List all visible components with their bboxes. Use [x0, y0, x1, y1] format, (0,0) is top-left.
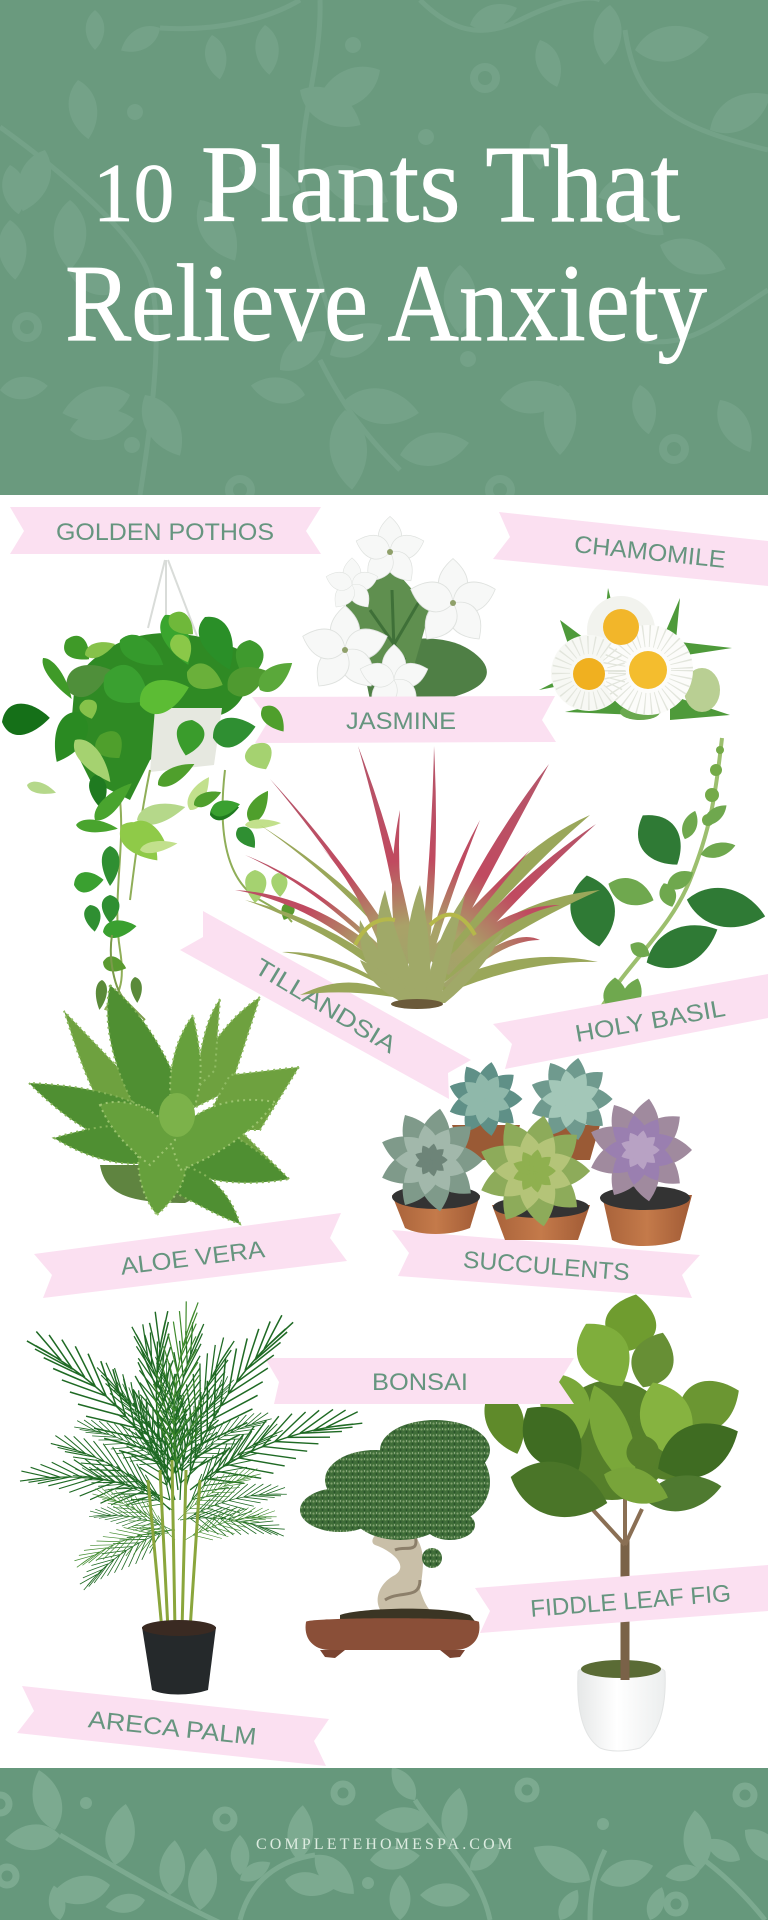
label: chamomile [493, 512, 768, 586]
black pot [142, 1627, 216, 1694]
label: aloe vera: ALOE VERA [119, 1236, 266, 1281]
label: aloe vera [34, 1213, 347, 1298]
palm stems [148, 1460, 200, 1630]
footer panel [0, 1762, 768, 1920]
vine tail [111, 935, 145, 1020]
foliage mass [70, 633, 248, 800]
hanger [148, 560, 197, 636]
label: areca palm [17, 1686, 329, 1766]
label: golden pothos [10, 507, 321, 554]
hanging pot [150, 708, 222, 772]
front rosettes [377, 1106, 483, 1214]
white pot [578, 1664, 665, 1751]
plant: jasmine [298, 516, 500, 716]
label: fiddle leaf fig [475, 1565, 768, 1633]
leaves [1, 701, 51, 736]
pot [100, 1165, 197, 1203]
plant: chamomile [539, 588, 732, 720]
plant: aloe vera [29, 985, 299, 1224]
header leaf pattern [0, 0, 768, 501]
label: areca palm: ARECA PALM [87, 1706, 258, 1751]
label: holy basil [493, 974, 768, 1069]
title: 10 Plants That [93, 123, 680, 245]
back pots [452, 1125, 520, 1160]
label: tillandsia [180, 911, 471, 1099]
header panel [0, 0, 768, 501]
plant: succulents [377, 1056, 692, 1246]
plant: tillandsia [235, 746, 600, 1009]
label: bonsai [265, 1358, 574, 1404]
plant: areca palm [17, 1299, 367, 1694]
label: jasmine: JASMINE [346, 708, 456, 735]
footer leaf pattern [0, 1762, 768, 1920]
plant: holy basil [565, 738, 768, 1015]
trunk [372, 1527, 445, 1620]
label: succulents: SUCCULENTS [462, 1247, 631, 1287]
label: jasmine [252, 696, 556, 743]
label: golden pothos: GOLDEN POTHOS [56, 519, 274, 546]
plant: fiddle leaf fig [475, 1290, 749, 1751]
plant: golden pothos [1, 560, 298, 1020]
plant: bonsai [300, 1420, 490, 1658]
label: bonsai: BONSAI [372, 1369, 468, 1396]
canopy [300, 1420, 490, 1568]
label: tillandsia: TILLANDSIA [250, 954, 401, 1059]
label: holy basil: HOLY BASIL [573, 995, 727, 1048]
footer website text: COMPLETEHOMESPA.COM [256, 1836, 512, 1853]
title [65, 123, 707, 364]
label: chamomile: CHAMOMILE [573, 531, 727, 574]
front pots [392, 1195, 480, 1234]
back rosettes [446, 1060, 522, 1138]
bonsai tray [340, 1609, 478, 1625]
title: Relieve Anxiety [65, 242, 707, 364]
label: fiddle leaf fig: FIDDLE LEAF FIG [529, 1580, 732, 1623]
label: succulents [392, 1230, 700, 1298]
